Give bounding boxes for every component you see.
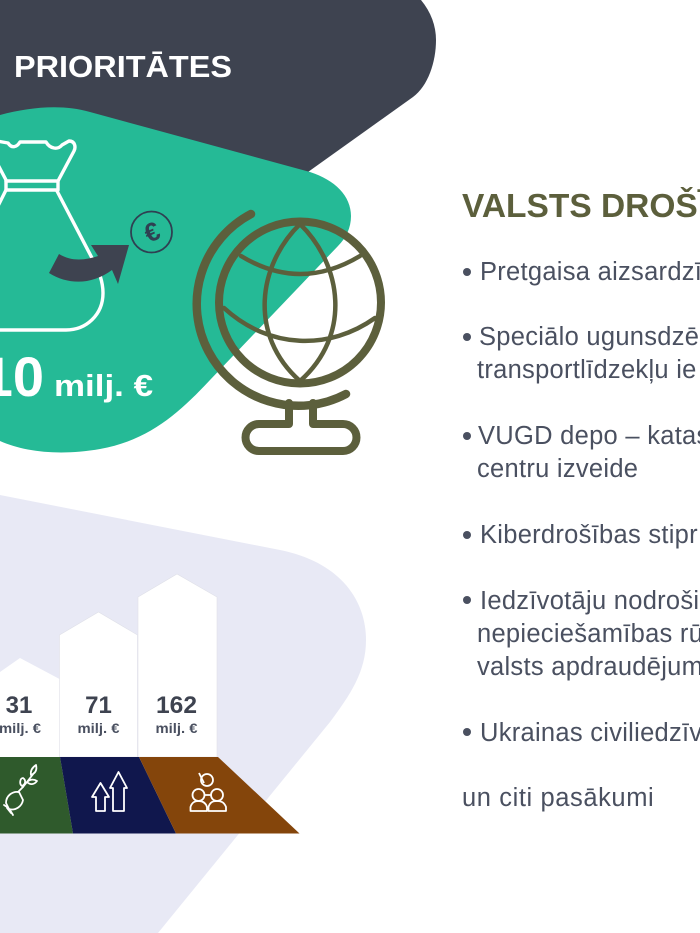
panel: teal amount shape bbox=[0, 107, 351, 452]
base segment: brown bbox=[139, 757, 300, 834]
item: special vehicles: transportlīdzekļu ie bbox=[477, 356, 697, 384]
bar: 71 million: milj. € bbox=[78, 721, 120, 736]
bar: 71 million: 71 bbox=[85, 692, 112, 719]
base segment: green bbox=[0, 757, 73, 834]
icon: euro coin bbox=[131, 212, 172, 252]
item: VUGD depots: centru izveide bbox=[477, 455, 638, 483]
icon: money bag bbox=[0, 141, 103, 330]
item: special vehicles bbox=[463, 323, 699, 384]
base segment: navy bbox=[60, 757, 176, 834]
bar: 162 million: milj. € bbox=[156, 721, 198, 736]
text: total amount unit: milj. € bbox=[54, 368, 153, 403]
heading: state security: VALSTS DROŠĪ bbox=[462, 186, 700, 225]
bar: 71 million bbox=[60, 612, 138, 757]
item: residents: Iedzīvotāju nodroši bbox=[480, 587, 699, 615]
item: cyber security: Kiberdrošības stipr bbox=[480, 521, 698, 549]
item: residents: nepieciešamības rū bbox=[477, 620, 700, 648]
item: air defence: Pretgaisa aizsardzī bbox=[480, 258, 700, 286]
bar: 162 million: 162 bbox=[156, 692, 197, 719]
icon: rising arrows bbox=[92, 772, 127, 811]
icon: globe bbox=[197, 214, 381, 451]
item: residents bbox=[463, 587, 700, 681]
panel: lavender chart background bbox=[0, 495, 366, 933]
bar: 31 million bbox=[0, 658, 60, 757]
icon: arrow to euro bbox=[49, 245, 129, 284]
item: Ukraine: Ukrainas civiliedzīv bbox=[480, 719, 700, 747]
icon: plug with leaves bbox=[4, 765, 37, 815]
bullet list: security measures bbox=[462, 258, 700, 812]
icon: group of people bbox=[190, 773, 226, 811]
panel: dark header shape bbox=[0, 0, 436, 200]
icon: euro coin: € bbox=[140, 215, 164, 249]
item: special vehicles: Speciālo ugunsdzē bbox=[479, 323, 699, 351]
closing line: un citi pasākumi bbox=[462, 784, 654, 812]
item: residents: valsts apdraudējum bbox=[477, 653, 700, 681]
heading: priorities: PRIORITĀTES bbox=[14, 49, 232, 84]
bar: 31 million: milj. € bbox=[0, 721, 42, 736]
item: VUGD depots bbox=[463, 422, 700, 483]
bar: 31 million: 31 bbox=[6, 692, 32, 719]
bar: 162 million bbox=[138, 574, 217, 757]
